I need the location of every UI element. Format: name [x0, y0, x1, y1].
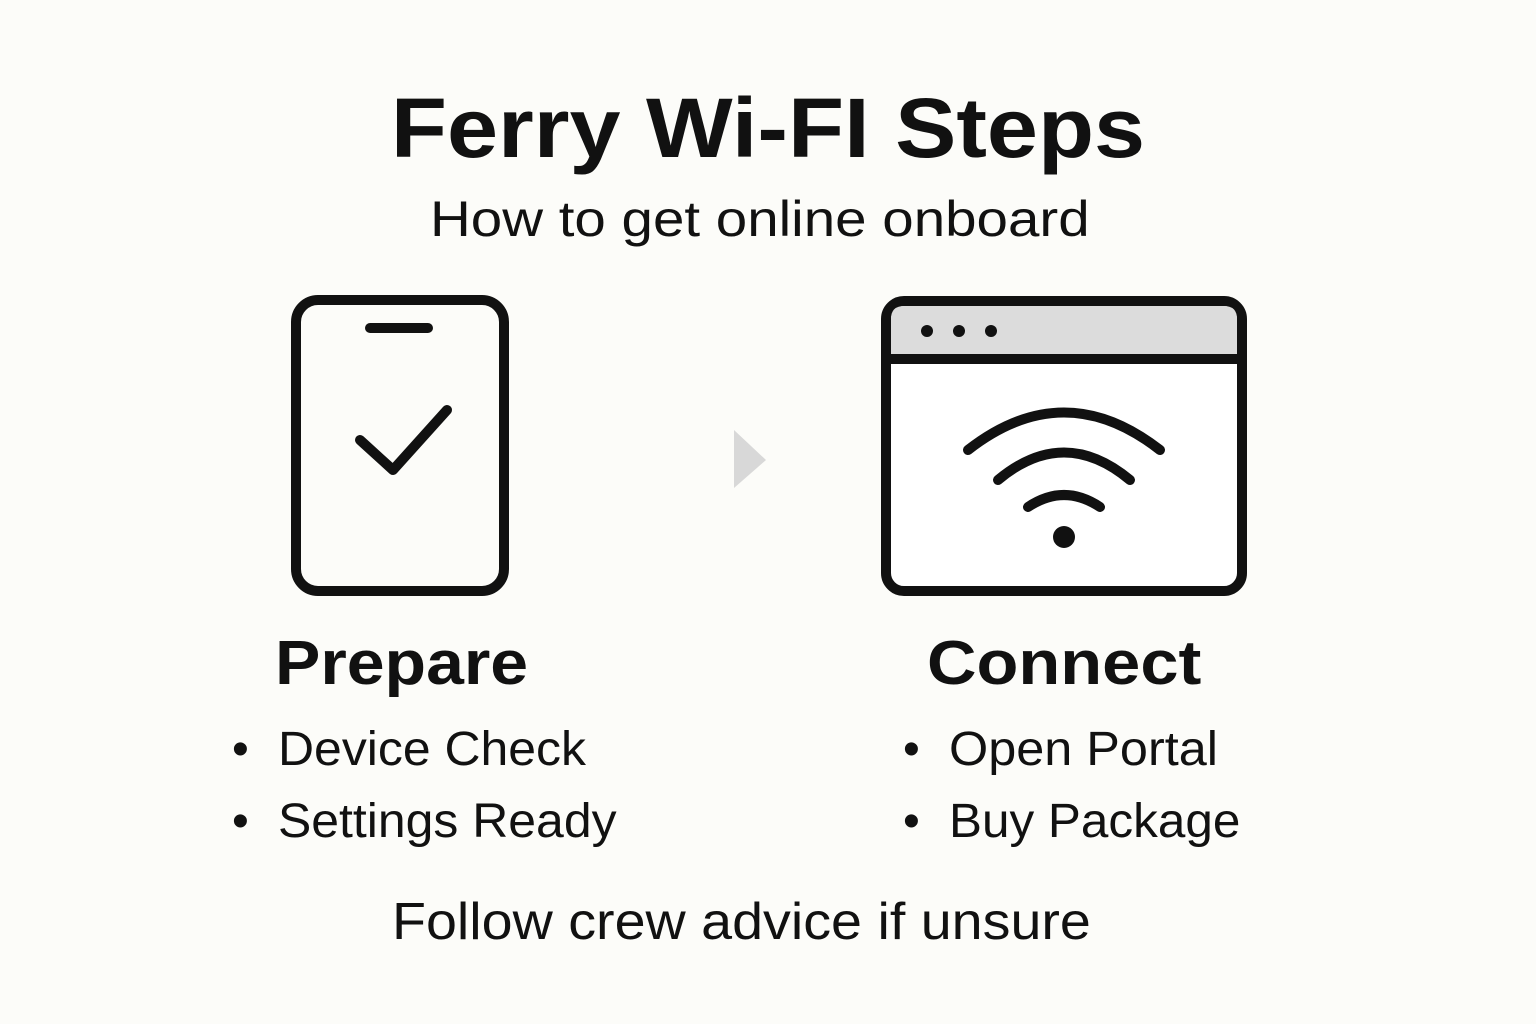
list: connect: [903, 723, 1240, 848]
list: connect: Buy Package: [949, 795, 1240, 848]
icon: phone with check: [291, 295, 509, 596]
subtitle: How to get online onboard: [430, 191, 1090, 247]
title: Ferry Wi-FI Steps: [391, 81, 1145, 175]
list: connect: •: [903, 795, 920, 848]
list: prepare: Settings Ready: [278, 795, 617, 848]
list: prepare: •: [232, 795, 249, 848]
heading: Connect: Connect: [927, 629, 1201, 698]
list: connect: •: [903, 723, 920, 776]
list: connect: Open Portal: [949, 723, 1218, 776]
icon: browser with wifi: [881, 296, 1247, 596]
heading: Prepare: Prepare: [275, 629, 528, 698]
list: prepare: •: [232, 723, 249, 776]
list: prepare: [232, 723, 617, 848]
list: prepare: Device Check: [278, 723, 586, 776]
footer note: Follow crew advice if unsure: [392, 893, 1091, 951]
arrow: [734, 430, 766, 488]
